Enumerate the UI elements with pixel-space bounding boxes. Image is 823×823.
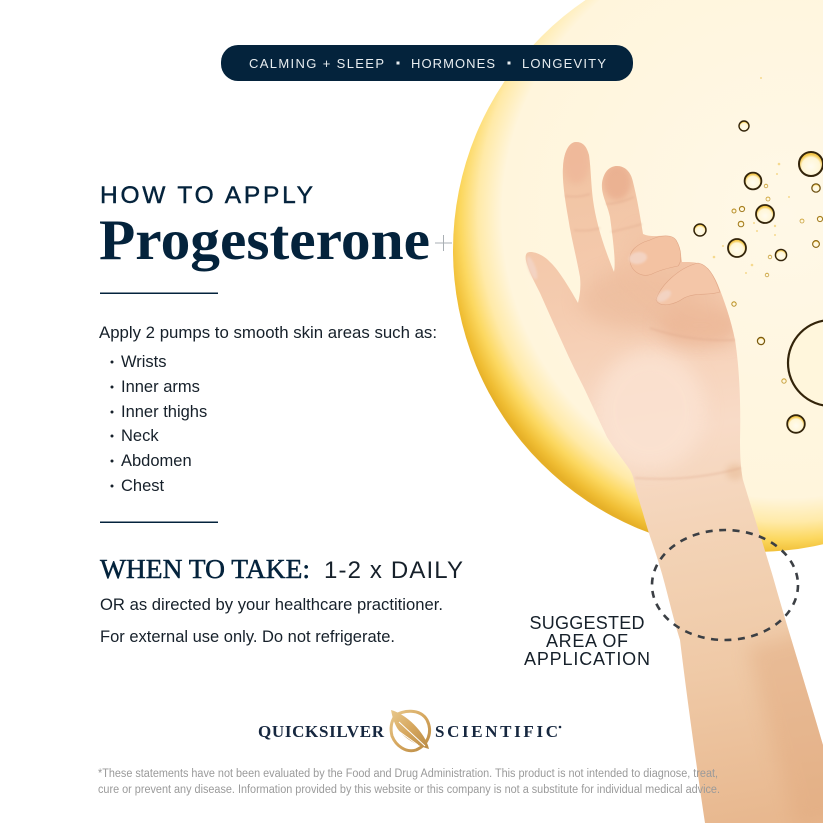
logo: SCIENTIFIC	[435, 722, 558, 741]
when to take: OR as directed by your healthcare practitioner.	[100, 596, 443, 614]
body area list: Inner thighs	[121, 403, 207, 421]
suggested area label: AREA OF	[546, 631, 628, 651]
disclaimer	[98, 768, 720, 796]
tiny oil droplets	[713, 77, 790, 274]
body area list: Chest	[121, 477, 165, 495]
when to take: WHEN TO TAKE:	[100, 554, 310, 584]
logo emblem	[391, 710, 430, 751]
when to take	[100, 554, 463, 646]
disclaimer: cure or prevent any disease. Information provided by this website or this company is not a substitute for individual medical advice.	[98, 784, 720, 796]
body area list	[110, 353, 207, 495]
title: HOW TO APPLY	[100, 182, 313, 209]
title	[99, 182, 452, 272]
fingernails	[525, 251, 673, 304]
when to take: 1-2 x DAILY	[324, 557, 463, 584]
body area list: Abdomen	[121, 452, 192, 470]
top category pill: HORMONES	[411, 56, 495, 71]
finger creases	[565, 194, 741, 479]
body area list: Inner arms	[121, 378, 200, 396]
suggested area label	[524, 613, 650, 669]
oil bubbles	[694, 121, 823, 433]
disclaimer: *These statements have not been evaluated by the Food and Drug Administration. This product is not intended to diagnose, treat,	[98, 768, 718, 780]
top category pill	[221, 45, 633, 81]
top category pill: CALMING + SLEEP	[249, 56, 384, 71]
hand and forearm	[525, 136, 823, 823]
skin shading	[562, 136, 823, 823]
logo: QUICKSILVER	[258, 722, 385, 741]
suggested area label: SUGGESTED	[530, 613, 644, 633]
top category pill: LONGEVITY	[522, 56, 606, 71]
when to take: For external use only. Do not refrigerate.	[100, 628, 395, 646]
logo	[258, 710, 561, 751]
curled ring finger	[630, 236, 681, 275]
body area list: Neck	[121, 427, 159, 445]
curled little finger	[656, 263, 720, 305]
application instructions	[99, 324, 437, 495]
suggested area label: APPLICATION	[524, 649, 650, 669]
title: Progesterone	[99, 209, 430, 272]
body area list: Wrists	[121, 353, 167, 371]
golden oil circle	[453, 0, 823, 552]
dashed application circle	[652, 530, 798, 640]
application instructions: Apply 2 pumps to smooth skin areas such as:	[99, 324, 437, 342]
